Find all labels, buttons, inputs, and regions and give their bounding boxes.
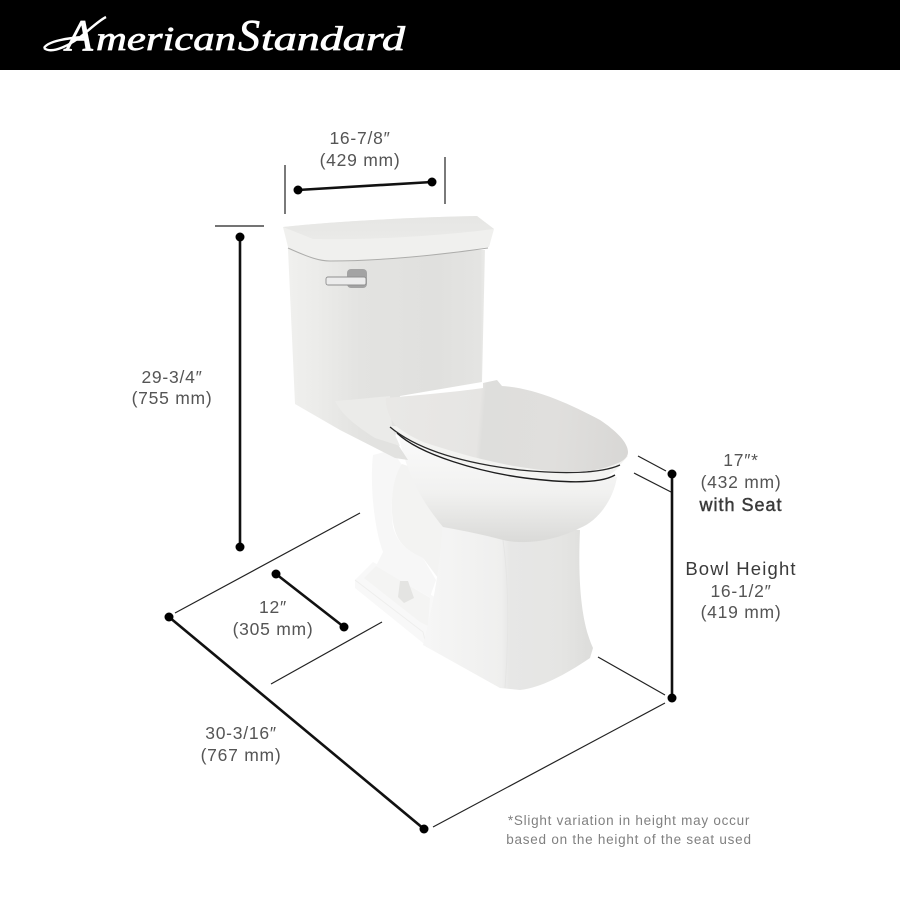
dimension: total height: 29-3/4″ (141, 367, 203, 387)
dimension: total height (132, 226, 264, 552)
dimension: bowl height (598, 450, 797, 702)
dimension: bowl height: (432 mm) (701, 472, 781, 492)
tank lid (283, 216, 494, 261)
tank body and deck (288, 249, 485, 460)
dimension: tank width: (429 mm) (320, 150, 400, 170)
dimension: depth: 30-3/16″ (205, 723, 277, 743)
logo: American Standard (44, 11, 406, 60)
header bar (0, 0, 900, 70)
dimension: tank width (285, 128, 445, 214)
dimension: rough-in: 12″ (259, 597, 287, 617)
seat rim (391, 426, 628, 480)
bolt cap (398, 581, 414, 603)
dimension: bowl height: (419 mm) (701, 602, 781, 622)
seat lid (386, 380, 628, 472)
dimension: bowl height: with Seat (698, 495, 783, 515)
dimension: bowl height: Bowl Height (685, 558, 797, 579)
pedestal (423, 522, 593, 690)
trapway arm (372, 450, 436, 597)
logo: American Standard: tandard (261, 21, 406, 58)
bowl (398, 433, 617, 542)
footnote: *Slight variation in height may occur (508, 813, 750, 828)
toilet illustration (283, 216, 628, 690)
logo: American Standard: A (63, 11, 94, 60)
dimension: bowl height: 17″* (723, 450, 759, 470)
deck surface (335, 396, 400, 446)
footnote (506, 813, 752, 847)
dimension: rough-in (233, 570, 382, 684)
logo: American Standard: S (238, 11, 260, 60)
dimension: depth: (767 mm) (201, 745, 281, 765)
dimension: rough-in: (305 mm) (233, 619, 313, 639)
flush handle (326, 269, 367, 288)
logo: American Standard: merican (96, 21, 236, 58)
dimension: total height: (755 mm) (132, 388, 212, 408)
dimension: depth (164, 513, 665, 834)
trapway hollow (392, 464, 446, 578)
footnote: based on the height of the seat used (506, 832, 752, 847)
dimension: bowl height: 16-1/2″ (710, 581, 772, 601)
dimension: tank width: 16-7/8″ (329, 128, 391, 148)
base foot (355, 562, 440, 645)
